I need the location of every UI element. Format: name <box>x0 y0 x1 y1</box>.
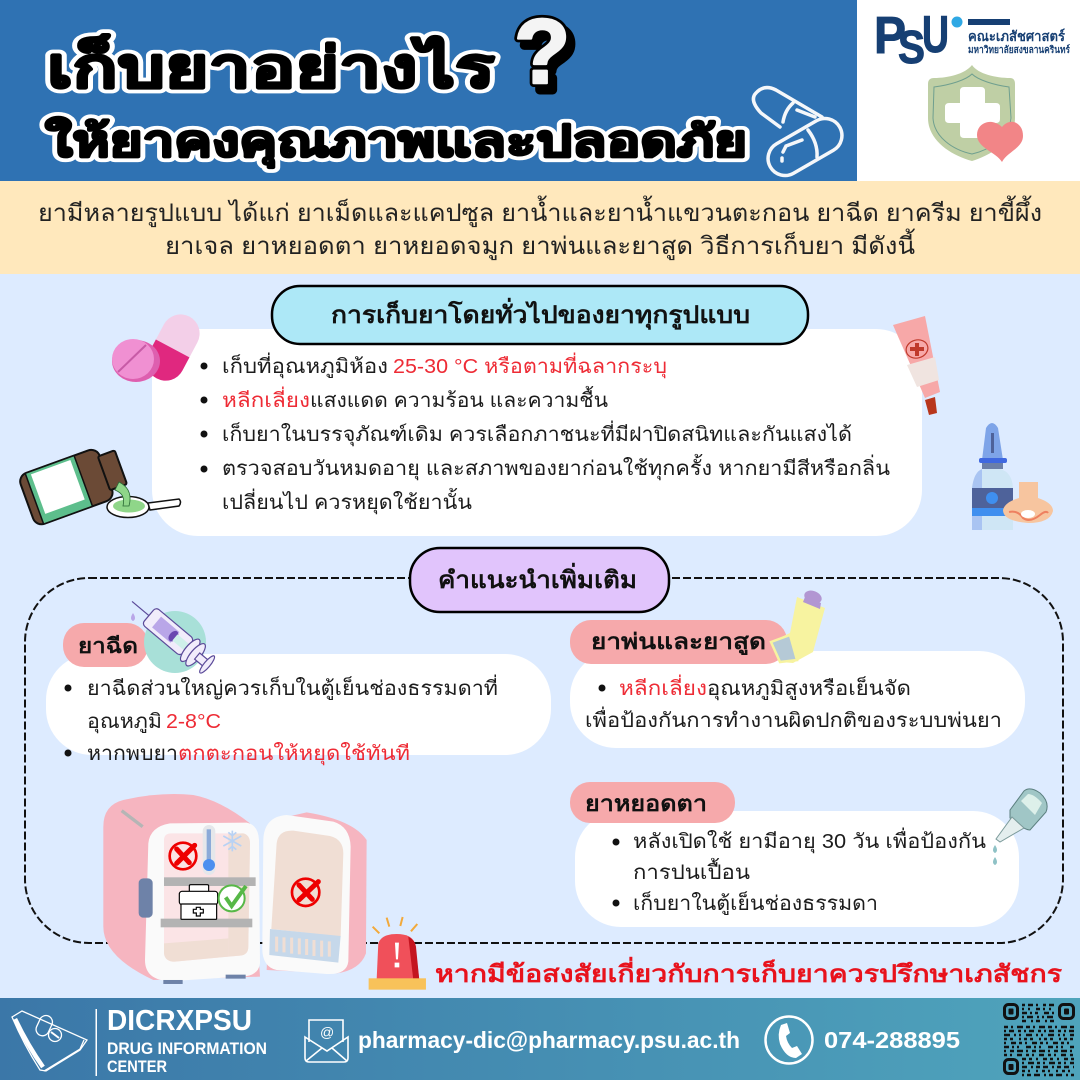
bullet list: general storage <box>200 352 890 515</box>
icon: first aid box <box>179 885 218 919</box>
bullet list: general storage: หลีกเลี่ยง <box>222 386 310 412</box>
heading pill: general storage <box>272 286 808 344</box>
icon: question mark: ? <box>514 1 570 103</box>
tag: eye drops <box>570 782 735 823</box>
organisation name: CENTER <box>107 1058 167 1076</box>
panel: additional advice (dashed frame) <box>25 548 1063 943</box>
icon: red cross mark, shelf <box>170 843 196 869</box>
bullets: injections: ตกตะกอนให้หยุดใช้ทันที <box>178 742 410 766</box>
heading pill: additional advice <box>410 548 669 612</box>
icon: question mark: ? <box>520 8 576 110</box>
panel: eye drops <box>570 782 1047 927</box>
icon: shield with heart <box>928 65 1023 162</box>
bullet list: general storage: 25-30 °C หรือตามที่ฉลากระบุ <box>393 352 667 379</box>
panel: general storage <box>152 286 922 536</box>
title line 1: เก็บยาอย่างไร <box>47 33 495 99</box>
email: pharmacy-dic@pharmacy.psu.ac.th <box>358 1027 740 1053</box>
bullets: injections: หากพบยา <box>87 743 178 765</box>
tag: injections: ยาฉีด <box>78 634 138 658</box>
phone number: 074-288895 <box>824 1027 960 1053</box>
bullets: injections: 2-8°C <box>166 711 221 733</box>
icon: phone <box>766 1016 812 1064</box>
bullets: eye drops: หลังเปิดใช้ ยามีอายุ 30 วัน เพื่อป้องกัน <box>633 827 986 854</box>
bullets: injections <box>64 674 498 766</box>
heading pill: additional advice: คำแนะนำเพิ่มเติม <box>438 562 637 594</box>
PSU logo: S <box>898 21 925 73</box>
bullet list: general storage: ตรวจสอบวันหมดอายุ และสภาพของยาก่อนใช้ทุกครั้ง หากยามีสีหรือกลิ่น <box>222 454 890 481</box>
bullets: injections: อุณหภูมิ <box>87 711 162 734</box>
bullet list: general storage: เปลี่ยนไป ควรหยุดใช้ยานั้น <box>222 488 472 515</box>
icon: envelope: @ <box>320 1024 334 1040</box>
tag: eye drops: ยาหยอดตา <box>585 791 707 816</box>
icon: nasal spray and nose <box>972 423 1053 530</box>
PSU logo: U <box>922 6 949 64</box>
organisation name: DICRXPSU <box>107 1005 252 1037</box>
bullets: injections: ยาฉีดส่วนใหญ่ควรเก็บในตู้เย็นช่องธรรมดาที่ <box>87 674 498 701</box>
icon: green check mark <box>219 885 246 911</box>
icon: envelope <box>305 1020 348 1062</box>
tag: inhalers: ยาพ่นและยาสูด <box>591 629 766 656</box>
organisation name: DRUG INFORMATION <box>107 1040 267 1058</box>
icon: red alarm siren <box>369 917 426 990</box>
icon: medicine bottle pouring into spoon <box>18 442 180 527</box>
panel: injections <box>46 591 551 766</box>
organisation name <box>107 1005 267 1076</box>
title line 2 <box>45 116 747 169</box>
icon: inhaler <box>771 588 825 663</box>
icon: red cross mark, door <box>292 879 319 906</box>
bullets: inhalers <box>585 674 1002 732</box>
bullets: inhalers: เพื่อป้องกันการทำงานผิดปกติของระบบพ่นยา <box>585 706 1002 732</box>
title line 2: ให้ยาคงคุณภาพและปลอดภัย <box>45 116 747 169</box>
tag: inhalers <box>570 620 787 664</box>
bullet list: general storage: เก็บยาในบรรจุภัณฑ์เดิม ควรเลือกภาชนะที่มีฝาปิดสนิทและกันแสงได้ <box>222 420 852 447</box>
logo panel <box>857 0 1080 181</box>
icon: book with pills <box>12 1011 87 1071</box>
PSU logo: P <box>874 7 906 65</box>
bullets: eye drops: การปนเปื้อน <box>633 858 750 884</box>
icon: pink tablet and capsule <box>112 308 206 387</box>
bullets: inhalers: อุณหภูมิสูงหรือเย็นจัด <box>707 675 911 701</box>
icon: eye dropper bottle <box>993 789 1047 865</box>
header banner <box>0 0 857 182</box>
icon: open refrigerator <box>103 794 367 984</box>
icon: question mark: ? <box>514 1 570 103</box>
icon: capsules <box>753 88 848 182</box>
warning message: หากมีข้อสงสัยเกี่ยวกับการเก็บยาควรปรึกษาเภสัชกร <box>435 956 1062 988</box>
tag: injections <box>63 623 148 667</box>
bullets: eye drops: เก็บยาในตู้เย็นช่องธรรมดา <box>633 890 878 916</box>
heading pill: general storage: การเก็บยาโดยทั่วไปของยาทุกรูปแบบ <box>331 297 750 331</box>
icon: snowflake <box>223 831 241 851</box>
divider <box>96 1009 97 1076</box>
title line 2: ให้ยาคงคุณภาพและปลอดภัย <box>45 116 747 169</box>
icon: ointment tube <box>893 316 940 415</box>
icon: syringe on teal circle <box>123 591 218 677</box>
footer <box>0 998 1080 1080</box>
bullet list: general storage: เก็บที่อุณหภูมิห้อง <box>222 352 388 379</box>
PSU logo <box>874 6 1071 73</box>
icon: thermometer <box>203 825 215 875</box>
intro band: ยามีหลายรูปแบบ ได้แก่ ยาเม็ดและแคปซูล ยาน้ำและยาน้ำแขวนตะกอน ยาฉีด ยาครีม ยาขี้ผึ้ง <box>38 195 1042 228</box>
intro band <box>0 181 1080 274</box>
title line 1: เก็บยาอย่างไร <box>47 33 495 99</box>
bullet list: general storage: แสงแดด ความร้อน และความชื้น <box>310 386 608 412</box>
PSU logo: คณะเภสัชศาสตร์ <box>968 28 1065 44</box>
QR code <box>1004 1004 1074 1075</box>
bullets: eye drops <box>612 827 986 916</box>
bullets: inhalers: หลีกเลี่ยง <box>619 674 707 700</box>
panel: inhalers <box>570 588 1025 748</box>
intro band: ยาเจล ยาหยอดตา ยาหยอดจมูก ยาพ่นและยาสูด วิธีการเก็บยา มีดังนี้ <box>165 228 915 261</box>
